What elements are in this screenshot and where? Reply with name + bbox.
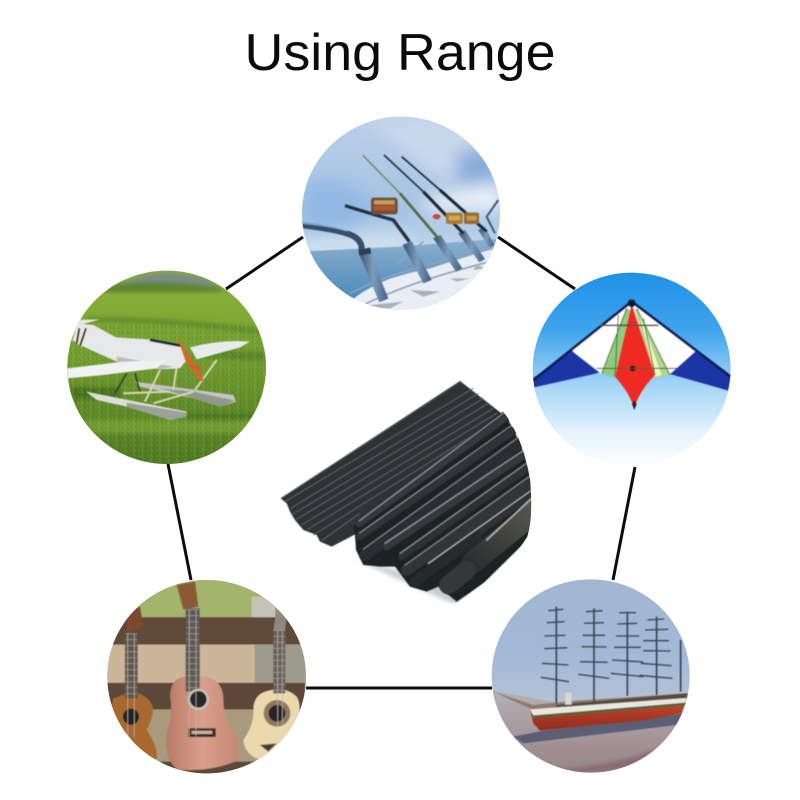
floats [135,382,236,407]
green panels [602,308,630,377]
right ukulele [243,689,300,762]
struts [123,360,217,403]
rods [345,206,409,242]
holders [358,249,388,302]
deck [354,248,494,310]
left ukulele [112,692,157,767]
sea [310,238,496,299]
thin rod bundle [281,381,510,547]
soft shadow [366,566,477,604]
reels [371,198,398,214]
panel: ukuleles [107,580,306,774]
red center [615,303,655,408]
propeller [177,335,204,382]
connector lines: pentagon [168,237,635,688]
panel: tall ship [492,579,690,773]
strings and frets [128,609,282,737]
white sail [572,302,695,373]
middle ukulele [166,677,239,770]
panel: kite [530,270,733,470]
hull [530,703,685,732]
title: Using Range [244,24,556,82]
blue wings [533,351,600,387]
background grass [128,580,272,618]
rail [300,225,362,252]
fuselage [73,323,189,369]
panel: fishing rods [302,116,500,310]
highlights [359,413,503,521]
thick rods [353,412,532,602]
masts [541,607,681,703]
panel: seaplane on grass [67,270,266,464]
wings [67,360,167,378]
fence [105,617,305,645]
frame [533,302,731,381]
central image: carbon fibre rods [281,381,537,605]
